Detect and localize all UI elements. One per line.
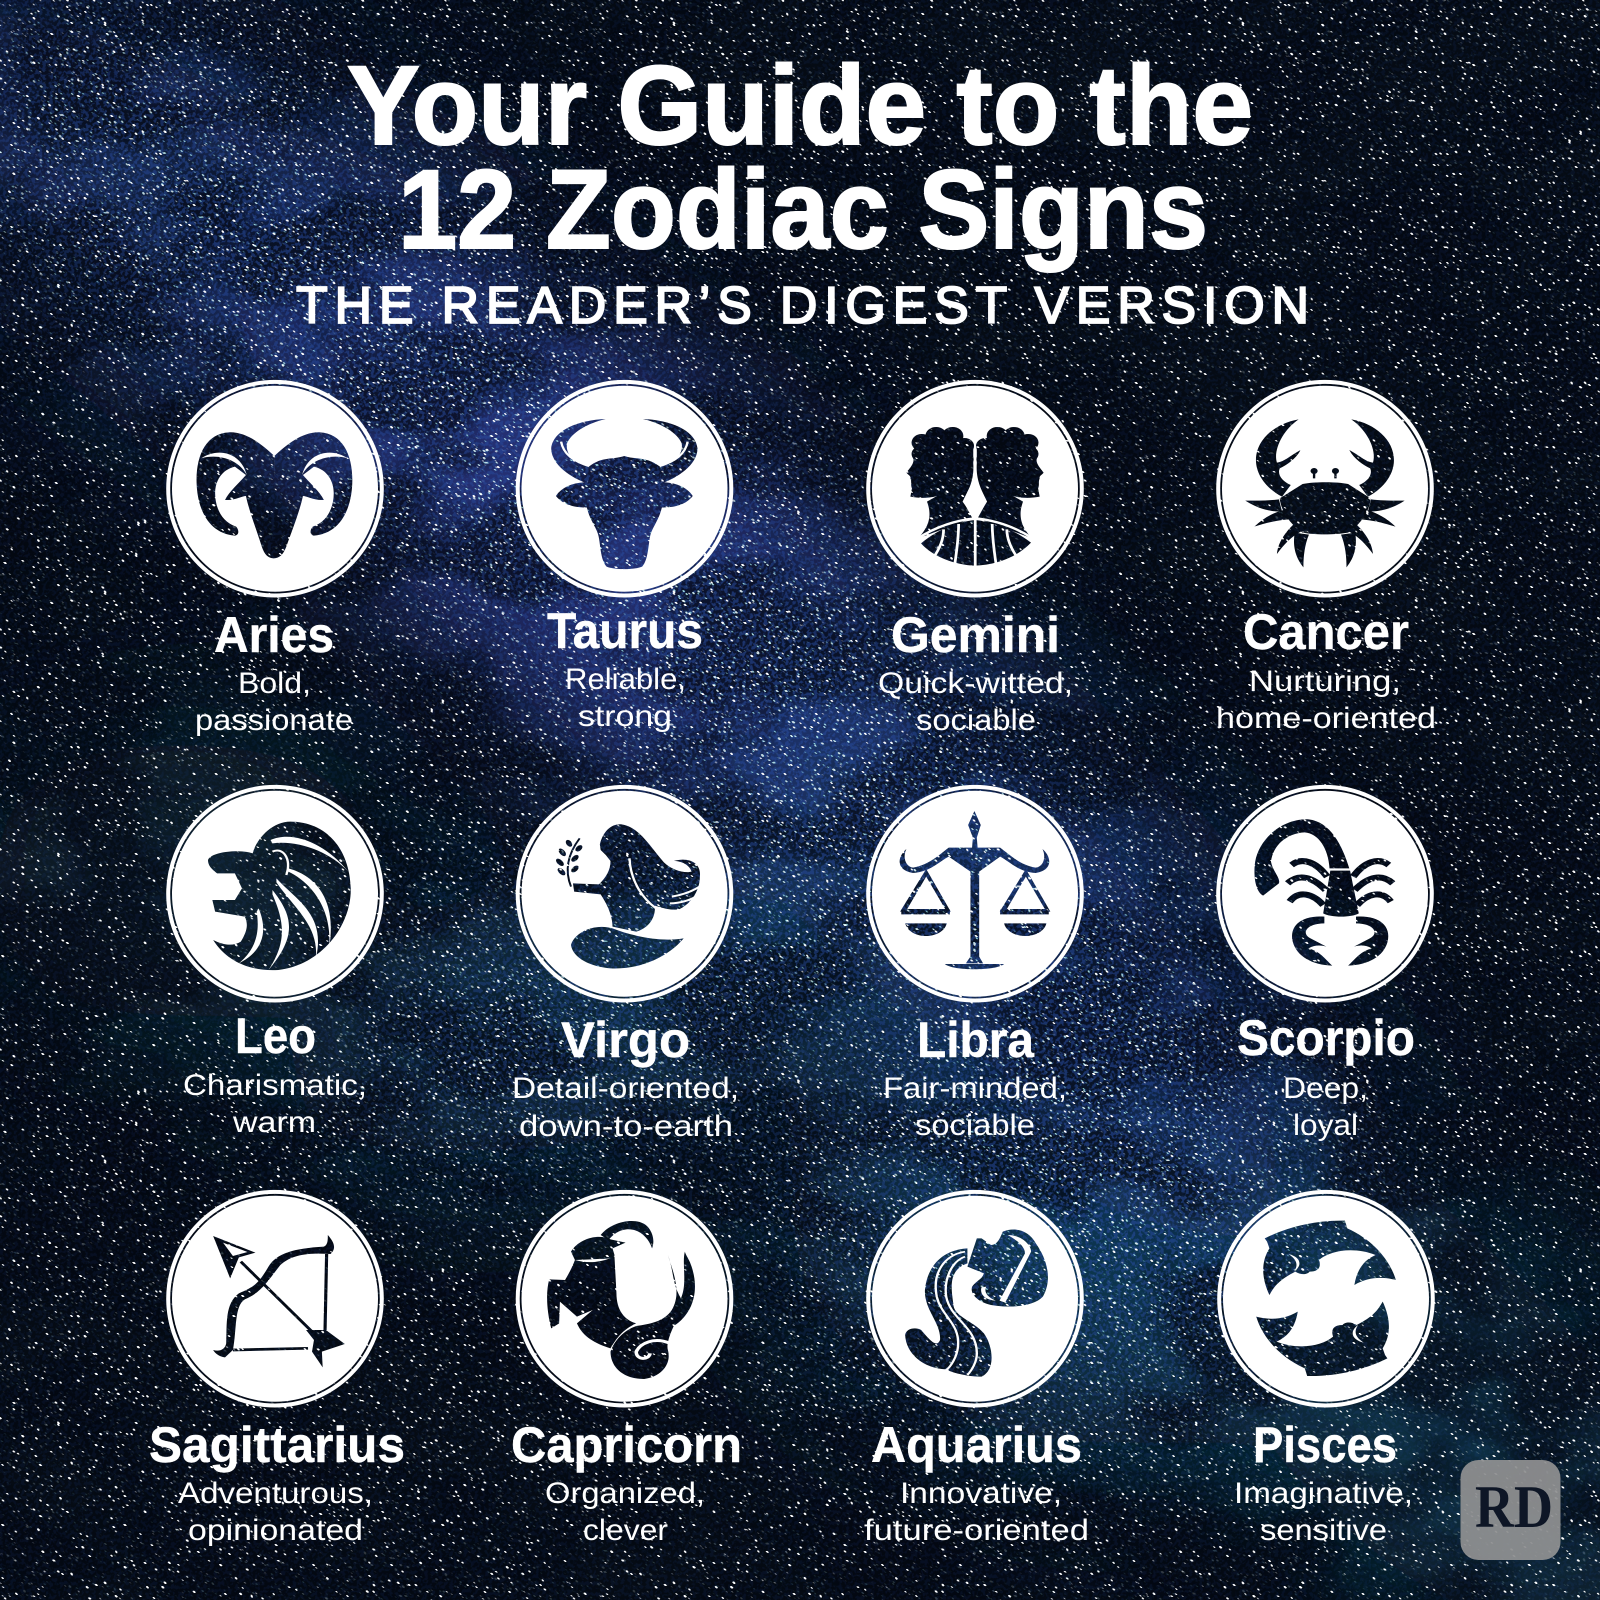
panel: Virgo [512,787,739,1143]
name: Cancer [1243,604,1409,660]
panel: Scorpio [1218,787,1432,1142]
panel: Gemini [868,382,1082,737]
traits [183,1069,367,1139]
traits: Nurturing, [1249,665,1401,698]
traits: sociable [916,704,1036,737]
traits: Fair-minded, [883,1072,1067,1105]
panel: Cancer [1216,382,1436,735]
subtitle: THE READER’S DIGEST VERSION [296,277,1309,335]
traits [883,1072,1067,1142]
traits: Organized, [545,1477,705,1510]
traits: Reliable, [565,663,686,696]
traits [195,667,353,737]
traits: sociable [915,1109,1035,1142]
traits: clever [583,1514,668,1547]
name: Sagittarius [149,1417,405,1473]
traits [878,667,1073,737]
panel: Pisces [1219,1192,1433,1547]
icon: sea goat [518,1192,731,1405]
traits: sensitive [1260,1514,1387,1547]
traits: loyal [1293,1109,1358,1142]
icon: maiden [518,787,731,1000]
name: Aries [214,607,334,663]
icon: scorpion [1218,787,1432,1000]
name: Taurus [547,603,703,659]
logo: RD badge [1460,1460,1560,1560]
panel: Libra [868,787,1082,1142]
title [347,43,1253,272]
icon: ram [168,382,382,596]
icon: bull [518,382,731,596]
icon: crab [1218,382,1432,596]
traits: Quick-witted, [878,667,1073,700]
traits [864,1477,1089,1547]
traits [565,663,686,733]
name: Leo [235,1008,316,1064]
traits: future-oriented [864,1514,1089,1547]
traits: Innovative, [900,1477,1062,1510]
traits [512,1072,739,1143]
traits: warm [232,1106,316,1139]
name: Capricorn [511,1417,742,1473]
traits: Imaginative, [1234,1477,1413,1510]
traits: Deep, [1283,1072,1368,1105]
traits: strong [578,700,672,733]
name: Libra [917,1012,1035,1068]
traits [1283,1072,1368,1142]
title: 12 Zodiac Signs [398,147,1208,272]
panel: Aries [168,382,382,737]
panel: Sagittarius [149,1192,405,1547]
traits: Adventurous, [178,1477,373,1510]
icon: scales [868,787,1082,1000]
traits [1234,1477,1413,1547]
traits: down-to-earth [519,1110,733,1143]
traits: passionate [195,704,353,737]
name: Pisces [1253,1417,1397,1473]
traits [178,1477,373,1547]
name: Aquarius [871,1417,1082,1473]
name: Gemini [891,607,1060,663]
icon: twins [868,382,1082,596]
traits: Detail-oriented, [512,1072,739,1105]
panel: Capricorn [511,1192,742,1547]
icon: bow and arrow [168,1192,382,1405]
traits [1216,665,1436,735]
traits: Bold, [238,667,311,700]
logo: RD badge: RD [1475,1474,1553,1540]
icon: lion [168,787,382,1000]
panel: Aquarius [864,1192,1089,1547]
traits: Charismatic, [183,1069,367,1102]
name: Virgo [561,1012,690,1068]
icon: fish [1219,1192,1433,1405]
panel: Leo [168,787,382,1139]
panel: Taurus [518,382,731,733]
traits [545,1477,705,1547]
name: Scorpio [1237,1010,1415,1066]
icon: water bearer jug [868,1192,1082,1405]
traits: home-oriented [1216,702,1436,735]
title: Your Guide to the [347,43,1253,168]
traits: opinionated [188,1514,363,1547]
